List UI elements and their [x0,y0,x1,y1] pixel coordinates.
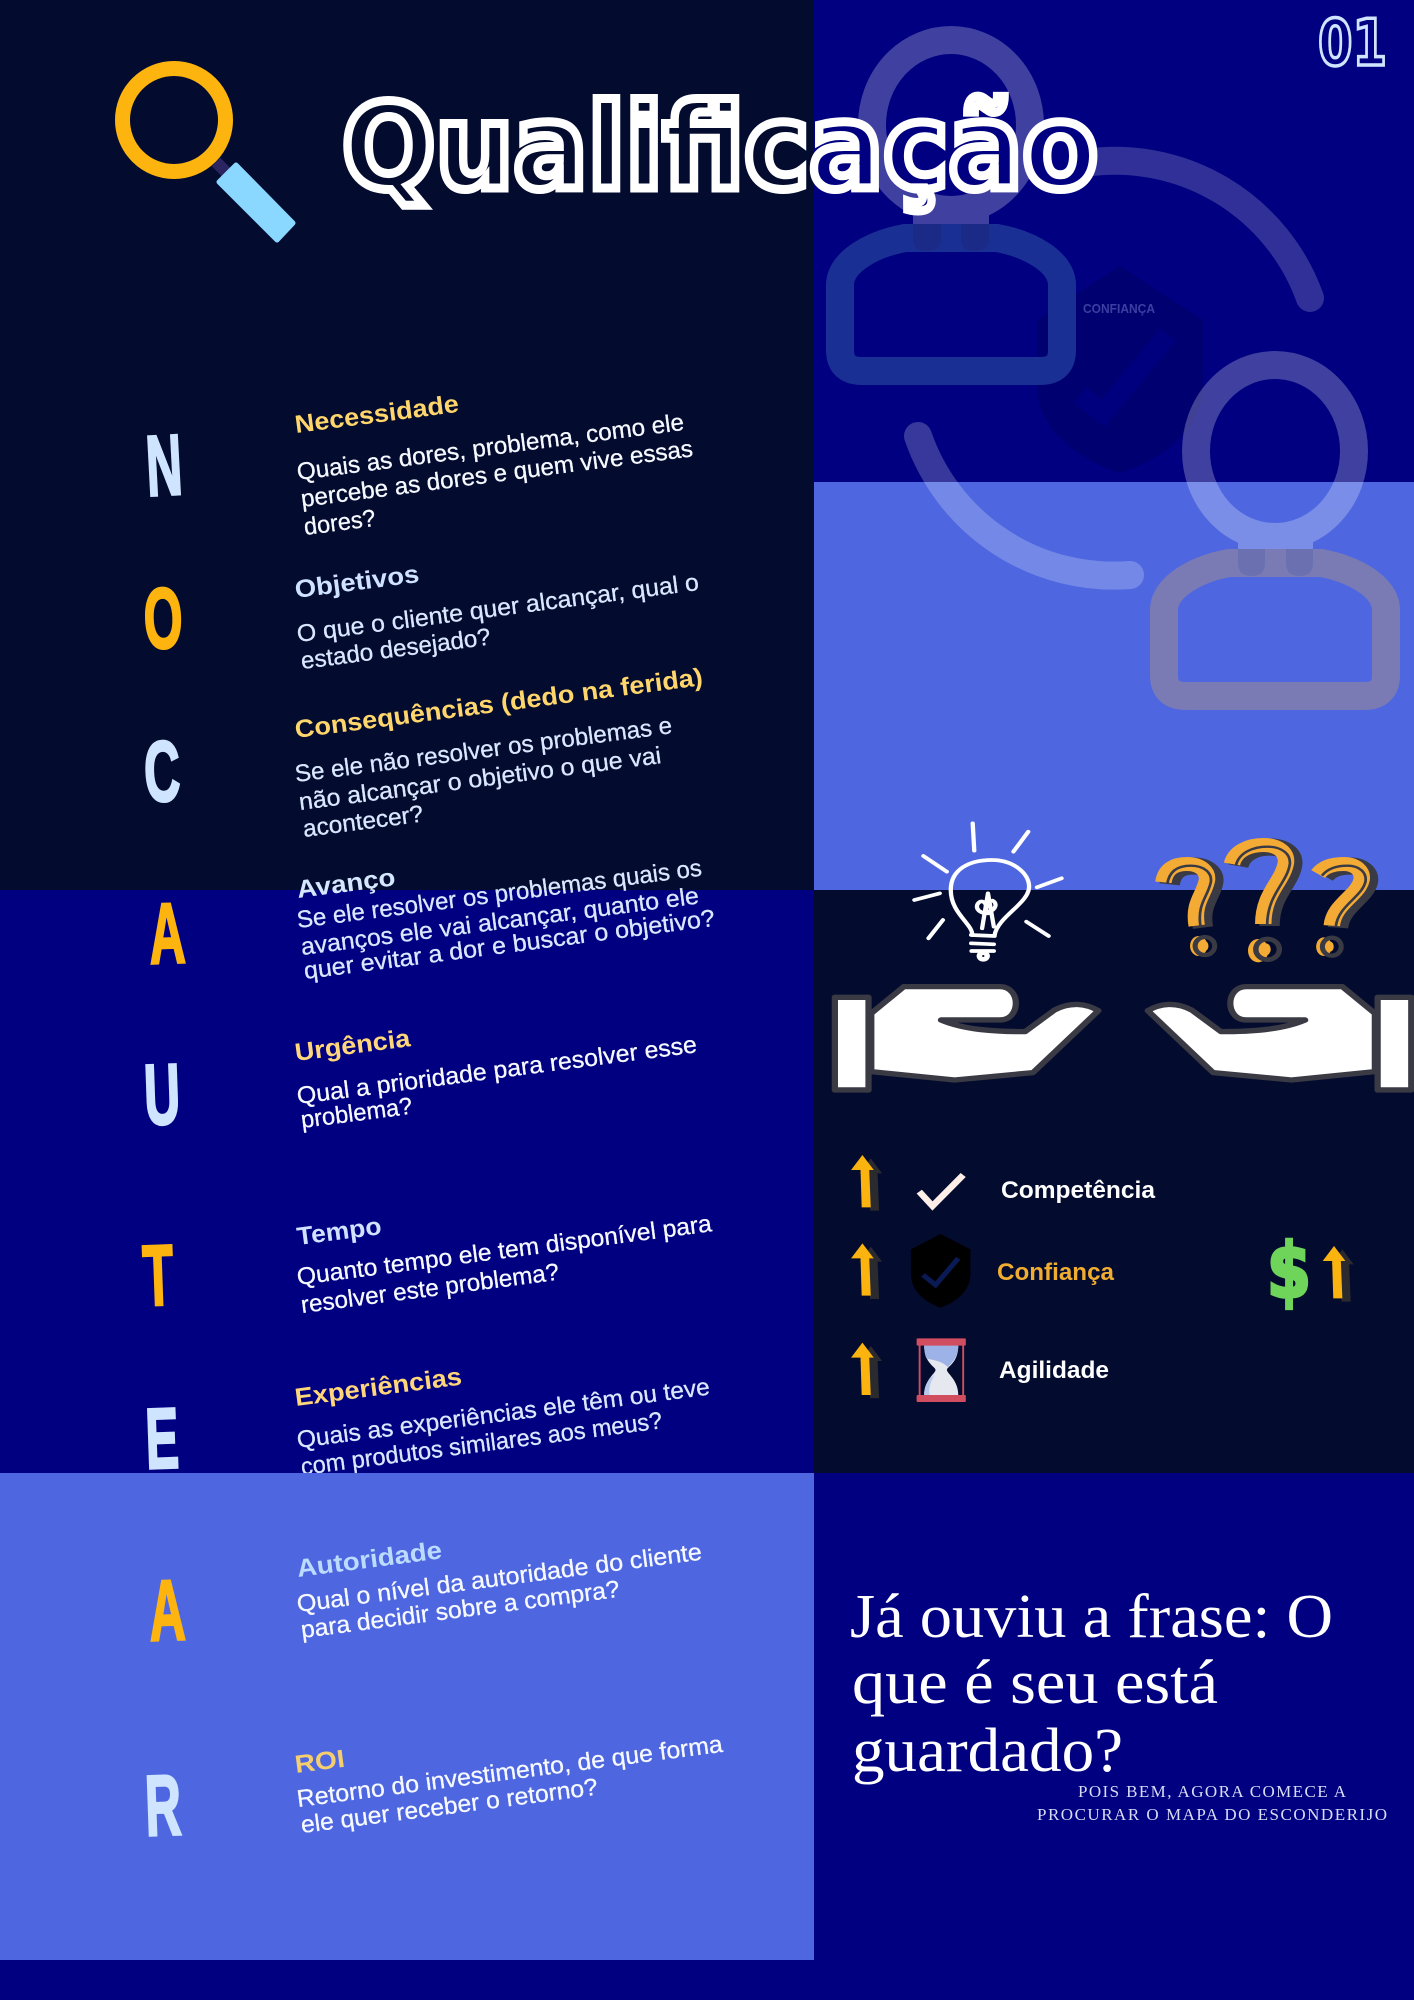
block: consequências: não alcançar o objetivo o que vai [297,742,663,816]
block: roi: ROI [293,1745,346,1779]
subtext: POIS BEM, AGORA COMECE A [1078,1782,1347,1801]
block: objetivos [293,560,700,675]
acronym letter O: O [142,569,184,667]
block: urgência: Qual a prioridade para resolver esse [295,1031,698,1110]
acronym letter N: N [144,416,185,514]
block: avanço: Se ele resolver os problemas quais os [295,855,703,934]
icon: faded shield [1037,266,1203,473]
icon: shield [911,1234,970,1308]
icon: question marks [1163,845,1368,962]
acronym letter R: R [143,1756,183,1854]
block: consequências: acontecer? [301,801,425,843]
block: objetivos: Objetivos [293,560,421,604]
block: experiências: Experiências [293,1363,463,1412]
acronym letter A: A [147,884,187,982]
block: roi: ele quer receber o retorno? [299,1774,599,1839]
block: experiências: com produtos similares aos meus? [299,1407,664,1481]
panel: bottom left periwinkle [0,1473,814,1960]
illustration: faded people and shield [840,40,1386,696]
block: necessidade: percebe as dores e quem vive essas [299,435,694,513]
acronym letter U: U [142,1045,182,1143]
panel: right periwinkle band [814,482,1414,890]
block: tempo: Tempo [295,1212,383,1251]
block: autoridade: Autoridade [295,1536,444,1583]
block: avanço: avanços ele vai alcançar, quanto ele [299,883,700,961]
icon: left hand [835,987,1098,1090]
dots [1190,936,1341,962]
icon: dollar and arrow [1267,1226,1354,1315]
panel: right dark [814,890,1414,1473]
block: consequências [293,663,704,843]
block: autoridade: para decidir sobre a compra? [299,1576,621,1644]
icon: right hand [1148,987,1411,1090]
icon: dollar and arrow: $ [1267,1226,1311,1315]
block: avanço: Avanço [295,863,397,904]
arc: upper [1085,161,1310,298]
icon: person one [840,40,1062,371]
quote: Já ouviu a frase: O [850,1583,1333,1651]
block: urgência: Urgência [293,1024,413,1067]
arrow up [851,1155,882,1211]
title: Qualificação [342,78,1098,216]
block: avanço: quer evitar a dor e buscar o objetivo? [302,905,716,985]
subtext [1037,1782,1387,1824]
label: Competência [1001,1177,1156,1204]
acronym letter C: C [142,722,182,820]
row: confiança [851,1234,1115,1308]
icon: magnifying glass [122,68,293,240]
arrow up [851,1243,882,1299]
block: necessidade [293,390,694,541]
block: roi: Retorno do investimento, de que forma [295,1731,725,1813]
inner lines [1167,847,1366,927]
block: objetivos: O que o cliente quer alcançar, qual o [295,569,700,648]
block: consequências: Consequências (dedo na ferida) [293,663,704,744]
block: experiências [293,1363,711,1481]
block: urgência: problema? [299,1093,414,1134]
acronym letter T: T [141,1226,175,1324]
icon: hourglass [917,1338,966,1402]
icon: person two [1164,365,1386,696]
subtext: PROCURAR O MAPA DO ESCONDERIJO [1037,1805,1387,1824]
block: necessidade: dores? [302,505,377,541]
shadow strokes [1170,847,1368,928]
faded label: confiança: CONFIANÇA [1083,301,1156,316]
block: objetivos: estado desejado? [299,624,492,675]
row: competência [851,1155,1156,1211]
quote [850,1583,1333,1785]
block: avanço [295,855,716,985]
icon: check mark [919,1175,963,1206]
icon: light bulb [914,823,1062,959]
block: consequências: Se ele não resolver os problemas e [293,712,674,788]
panel: top left dark [0,0,814,890]
block: tempo: Quanto tempo ele tem disponível para [295,1210,714,1291]
label: Confiança [997,1259,1115,1286]
block: autoridade: Qual o nível da autoridade do cliente [295,1539,703,1618]
block: autoridade [295,1536,703,1644]
label: Agilidade [999,1357,1109,1384]
row: agilidade [851,1338,1109,1402]
quote: guardado? [852,1717,1123,1785]
acronym letter A: A [147,1561,187,1659]
acronym letter E: E [144,1389,180,1487]
quote: que é seu está [852,1649,1218,1717]
arrow up [851,1343,882,1398]
orange strokes [1163,845,1362,926]
page number: 01 [1318,7,1387,81]
block: urgência [293,1024,698,1134]
arc: lower [918,436,1130,576]
block: experiências: Quais as experiências ele têm ou teve [295,1374,711,1454]
block: necessidade: Necessidade [293,390,460,439]
block: necessidade: Quais as dores, problema, como ele [295,409,686,486]
block: tempo: resolver este problema? [299,1259,561,1319]
